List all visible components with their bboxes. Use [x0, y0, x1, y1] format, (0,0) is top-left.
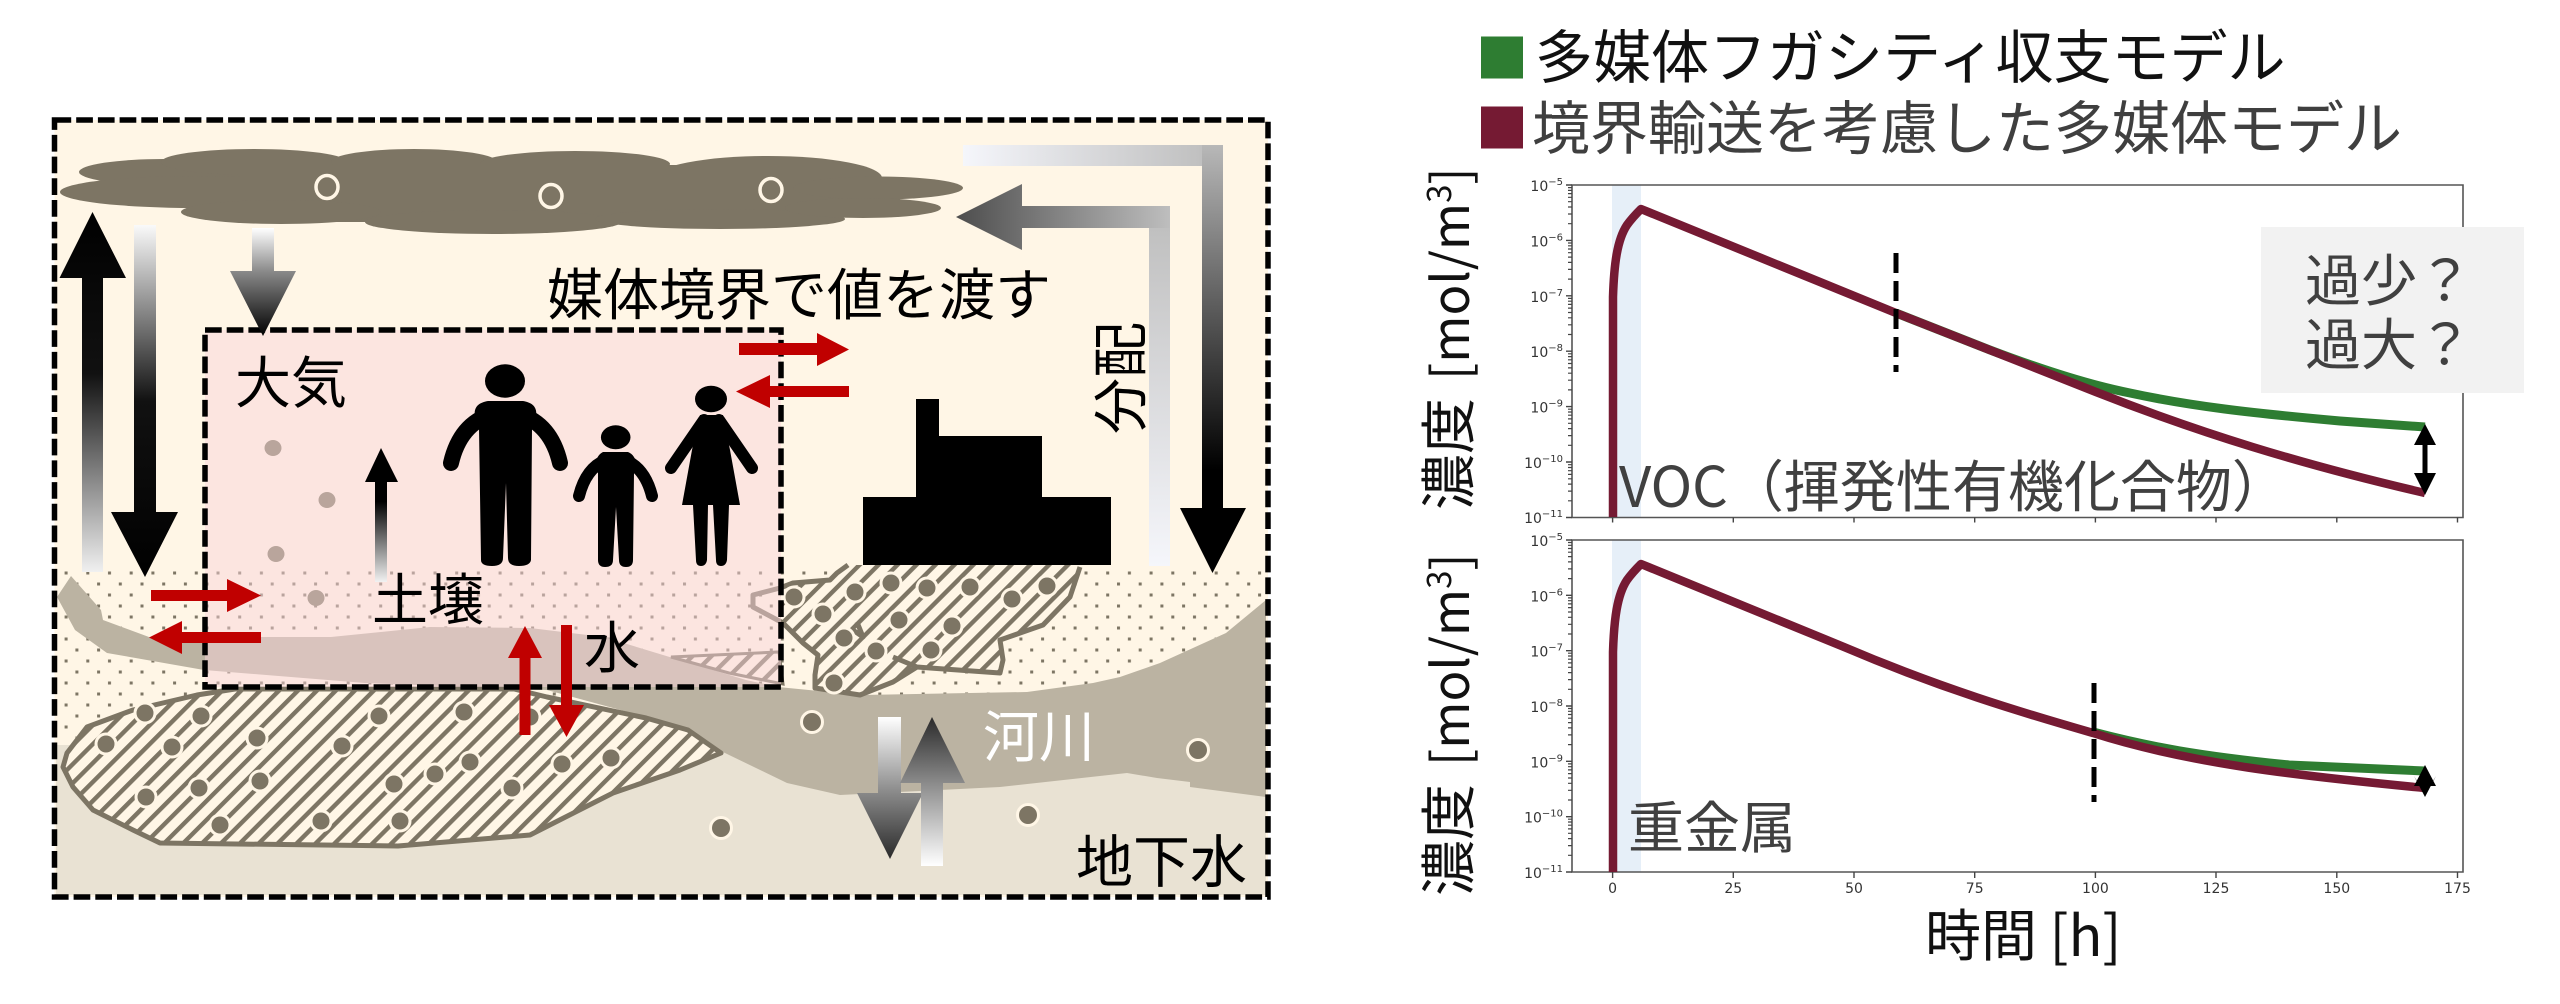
cloud: [60, 149, 963, 234]
y tick labels: −10: [1542, 454, 1563, 465]
human exposure box: [205, 330, 781, 687]
arrow: red water down: [549, 625, 584, 737]
x tick labels: 150: [2323, 881, 2350, 897]
line: boundary transport model: [1613, 209, 2425, 517]
legend text: green: 多媒体フガシティ収支モデル: [1535, 11, 2286, 95]
label: air: 大気: [235, 339, 347, 420]
y axis label: top: ]: [1410, 167, 1484, 185]
x tick labels: 50: [1845, 881, 1863, 897]
axes: [1572, 185, 2463, 518]
arrow: right elbow to ground: [963, 145, 1246, 573]
double arrow: gap: [2414, 765, 2436, 797]
ticks: [1566, 540, 2458, 878]
arrow: river to groundwater: [857, 717, 923, 859]
callout text: too high: 過大？: [2305, 301, 2473, 382]
y tick labels: 10: [1530, 345, 1548, 361]
x tick labels: 75: [1966, 881, 1984, 897]
label: river: 河川: [983, 693, 1095, 774]
legend: [1481, 11, 2402, 166]
arrow: groundwater to river: [900, 717, 965, 866]
callout box: [2261, 227, 2524, 393]
y tick labels: −7: [1548, 288, 1563, 299]
y tick labels: 10: [1530, 290, 1548, 306]
y axis label: bottom: 濃度: [1405, 784, 1486, 896]
icon: child: [579, 425, 652, 567]
label: boundary: 媒体境界で値を渡す: [547, 251, 1051, 332]
panel: multimedia environment diagram: [54, 120, 1268, 899]
y tick labels: 10: [1524, 811, 1542, 827]
y tick labels: [1524, 177, 1563, 527]
icon: man: [451, 364, 560, 566]
y tick labels: 10: [1524, 511, 1542, 527]
y tick labels: −9: [1548, 753, 1563, 764]
label: groundwater: 地下水: [1076, 817, 1247, 899]
legend swatch: green: [1481, 36, 1523, 78]
chart: heavy metal concentration: [1524, 532, 2471, 897]
y tick labels: −8: [1548, 343, 1563, 354]
line: boundary transport model: [1613, 564, 2425, 872]
line: fugacity model: [1896, 313, 2425, 427]
exposure band: [1612, 185, 1641, 518]
particles in sediment: [96, 573, 1208, 838]
arrow: air up left: [60, 212, 126, 572]
arrow: air down left: [111, 225, 178, 577]
y tick labels: −6: [1548, 587, 1563, 598]
y tick labels: −10: [1542, 809, 1563, 820]
dashed divider: [1894, 253, 1898, 372]
y tick labels: 10: [1530, 234, 1548, 250]
y axis label: bottom: 3: [1413, 571, 1461, 589]
y ticks: [1566, 185, 2458, 522]
y tick labels: 10: [1530, 755, 1548, 771]
label: VOC: VOC（揮発性有機化合物）: [1619, 443, 2288, 524]
x tick labels: 100: [2082, 881, 2109, 897]
chart: VOC concentration: [1524, 177, 2524, 527]
soil dot pattern: [58, 570, 1266, 810]
dashed box: human exposure boundary: [205, 330, 781, 687]
x tick labels: 125: [2203, 881, 2229, 897]
legend text: maroon: 境界輸送を考慮した多媒体モデル: [1532, 82, 2402, 166]
arrow: red to inside: [736, 375, 849, 408]
icon: woman: [671, 386, 752, 566]
label: soil: 土壌: [372, 556, 484, 637]
y tick labels: −5: [1548, 532, 1563, 543]
axes: [1572, 540, 2463, 872]
arrow: red to outside: [739, 333, 849, 366]
arrow: red water up: [508, 626, 542, 735]
legend swatch: maroon: [1481, 106, 1523, 148]
arrow: cloud down: [230, 228, 296, 336]
arrow: right elbow to cloud: [956, 184, 1170, 566]
river: [57, 576, 1266, 797]
y axis label: bottom: [mol/m: [1410, 589, 1484, 766]
label: water: 水: [584, 604, 640, 685]
y tick labels: [1524, 532, 1563, 882]
sediment lens: small patch: [671, 652, 783, 684]
y tick labels: 10: [1530, 645, 1548, 661]
y tick labels: −11: [1542, 509, 1563, 520]
y tick labels: −7: [1548, 643, 1563, 654]
y tick labels: 10: [1530, 534, 1548, 550]
groundwater layer: [56, 745, 1266, 895]
atmosphere background: [54, 120, 1268, 897]
dots in air and soil: [264, 440, 336, 606]
y tick labels: 10: [1524, 866, 1542, 882]
arrow: thin uplift: [365, 448, 398, 582]
y tick labels: −11: [1542, 864, 1563, 875]
y tick labels: 10: [1530, 401, 1548, 417]
sediment lens: lower left: [63, 689, 721, 846]
y axis label: bottom: ]: [1410, 553, 1484, 571]
label: heavy metals: 重金属: [1628, 784, 1796, 865]
sediment lens: upper right: [753, 565, 1080, 695]
y tick labels: −8: [1548, 698, 1563, 709]
label: partition: 分配: [1077, 322, 1158, 434]
x tick labels: [1608, 881, 2471, 897]
arrow: red soil out: [149, 621, 261, 654]
x axis label: 時間 [h]: [1925, 892, 2121, 973]
x tick labels: 175: [2444, 881, 2471, 897]
y tick labels: 10: [1530, 589, 1548, 605]
y tick labels: −6: [1548, 232, 1563, 243]
double arrow: gap: [2414, 424, 2436, 495]
line: fugacity model: [2093, 732, 2425, 771]
callout text: too low: 過少？: [2305, 237, 2473, 318]
x tick labels: 0: [1608, 881, 1617, 897]
icon: building: [863, 399, 1111, 565]
y axis label: top: [mol/m: [1410, 203, 1484, 380]
arrow: red soil in: [151, 579, 261, 612]
dashed outer boundary: [54, 120, 1268, 897]
y tick labels: −9: [1548, 399, 1563, 410]
y axis label: top: 濃度: [1405, 398, 1486, 510]
y tick labels: −5: [1548, 177, 1563, 188]
y tick labels: 10: [1524, 456, 1542, 472]
x tick labels: 25: [1724, 881, 1742, 897]
y tick labels: 10: [1530, 700, 1548, 716]
exposure band: [1612, 540, 1641, 872]
dashed divider: [2092, 683, 2096, 802]
y tick labels: 10: [1530, 179, 1548, 195]
y axis label: top: 3: [1413, 185, 1461, 203]
